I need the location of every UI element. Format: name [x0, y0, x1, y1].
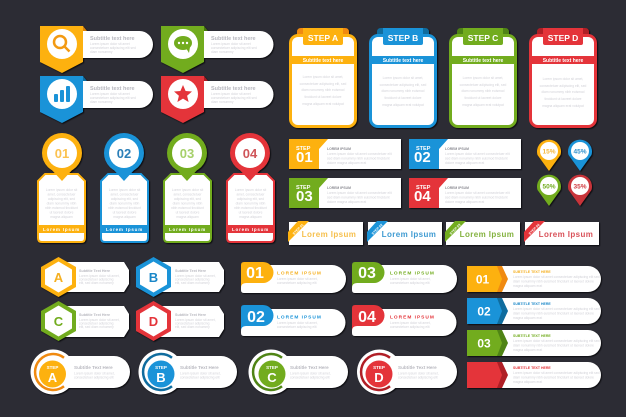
- panel: pin card 02: magna aliquam: [113, 215, 136, 219]
- panel: chart badge: Lorem ipsum dolor sit amet: [90, 92, 130, 96]
- icon: pin 45%: 45%: [573, 148, 587, 156]
- panel: pin card 04: diam nonummy nibh: [236, 202, 266, 206]
- panel: number pill 01: 01: [246, 265, 264, 282]
- panel: hexagon B: Subtitle Text Here: [175, 269, 206, 273]
- panel: step 02 box: LOREM IPSUM: [445, 147, 469, 151]
- panel: number pill 03: [352, 262, 457, 293]
- panel: arrow row 03: [467, 330, 601, 356]
- panel: step B card: Subtitle text here: [383, 58, 423, 64]
- panel: hexagon B: [136, 257, 224, 297]
- panel: hexagon B: B: [149, 270, 158, 285]
- panel: arrow row 04: SUBTITLE TEXT HERE: [513, 366, 551, 370]
- panel: number pill 01: consectetuer adipiscing elit: [277, 281, 317, 285]
- panel: circle step D: Lorem ipsum dolor sit amet,: [398, 372, 439, 376]
- panel: arrow row 01: SUBTITLE TEXT HERE: [513, 270, 551, 274]
- panel: circle step B: B: [156, 370, 166, 385]
- panel: hexagon D: elit, sed diam nonummy: [175, 325, 210, 329]
- panel: pin card 04: ut laoreet dolore: [239, 210, 263, 214]
- panel: step D card: consectetuer adipiscing elit, sed: [540, 84, 587, 88]
- panel: ribbon label green: Lorem Ipsum: [460, 230, 514, 239]
- panel: pin card 04: Lorem Ipsum: [232, 227, 269, 232]
- panel: ribbon label blue: [367, 221, 442, 245]
- panel: arrow row 03: 03: [477, 336, 491, 350]
- panel: circle step A: Subtitle Text Here: [74, 365, 113, 370]
- panel: arrow row 02: Lorem ipsum dolor sit amet consectetuer adipiscing elit sed: [513, 307, 600, 311]
- panel: step D card: diam nonummy nibh euismod: [541, 90, 585, 94]
- panel: chart badge: diam nonummy: [90, 100, 113, 104]
- panel: arrow row 04: diam nonummy nibh euismod tincidunt ut laoreet dolore: [513, 376, 594, 380]
- panel: step C card: tincidunt ut laoreet dolore: [464, 96, 502, 100]
- panel: circle step C: [248, 350, 348, 394]
- panel: arrow row 03: Lorem ipsum dolor sit amet consectetuer adipiscing elit sed: [513, 339, 600, 343]
- panel: step 03 box: STEP: [296, 185, 311, 191]
- panel: pin card 01: diam nonummy nibh: [47, 202, 77, 206]
- panel: pin card 03: magna aliquam: [176, 215, 199, 219]
- panel: arrow row 03: magna aliquam erat: [513, 348, 542, 352]
- panel: hexagon B: elit, sed diam nonummy: [175, 281, 210, 285]
- panel: step B card: consectetuer adipiscing elit, sed: [380, 83, 427, 87]
- panel: step A card: Lorem ipsum dolor sit amet,: [303, 75, 343, 79]
- panel: step A card: Subtitle text here: [303, 58, 343, 64]
- panel: search badge: [40, 26, 153, 73]
- panel: pin card 03: 03: [180, 146, 194, 161]
- panel: search badge: Lorem ipsum dolor sit amet: [90, 42, 130, 46]
- panel: number pill 03: Lorem ipsum dolor sit amet,: [390, 277, 431, 281]
- panel: number pill 04: LOREM IPSUM: [390, 314, 435, 320]
- panel: arrow row 02: [467, 298, 601, 324]
- panel: arrow row 03: diam nonummy nibh euismod tincidunt ut laoreet dolore: [513, 344, 594, 348]
- panel: pin card 04: [227, 133, 274, 242]
- panel: step C card: STEP C: [468, 33, 498, 43]
- panel: pin card 01: [38, 133, 85, 242]
- panel: pin card 04: nibh euismod tincidunt: [234, 206, 267, 210]
- panel: pin card 01: adipiscing elit, sed: [48, 197, 75, 201]
- panel: search badge: diam nonummy: [90, 50, 113, 54]
- panel: hexagon C: consectetuer adipiscing: [79, 322, 114, 326]
- panel: arrow row 02: diam nonummy nibh euismod tincidunt ut laoreet dolore: [513, 312, 594, 316]
- panel: pin card 02: Lorem ipsum dolor sit: [109, 188, 140, 192]
- panel: hexagon C: [41, 301, 129, 341]
- panel: hexagon D: Subtitle Text Here: [175, 313, 206, 317]
- panel: circle step C: C: [267, 370, 277, 385]
- panel: star badge: Subtitle text here: [211, 86, 256, 92]
- panel: chat badge: diam nonummy: [211, 50, 234, 54]
- panel: hexagon D: [136, 301, 224, 341]
- icon: pin 35%: [568, 175, 592, 206]
- panel: number pill 01: LOREM IPSUM: [277, 270, 322, 276]
- panel: circle step D: D: [374, 370, 384, 385]
- panel: step C card: [449, 28, 517, 128]
- panel: step 01 box: STEP: [296, 146, 311, 152]
- panel: arrow row 01: Lorem ipsum dolor sit amet consectetuer adipiscing elit sed: [513, 275, 600, 279]
- panel: pin card 02: diam nonummy nibh: [110, 202, 140, 206]
- panel: pin card 02: nibh euismod tincidunt: [108, 206, 141, 210]
- panel: ribbon label red: [524, 221, 599, 245]
- panel: circle step A: A: [48, 370, 58, 385]
- panel: circle step B: STEP: [155, 365, 167, 370]
- panel: arrow row 04: Lorem ipsum dolor sit amet consectetuer adipiscing elit sed: [513, 371, 600, 375]
- panel: circle step A: [30, 350, 130, 394]
- icon: pin 15%: 15%: [542, 148, 556, 156]
- panel: pin card 02: Lorem Ipsum: [106, 227, 143, 232]
- panel: step 04 box: [409, 178, 521, 208]
- panel: ribbon label yellow: [288, 221, 363, 245]
- icon: pin 50%: 50%: [542, 184, 556, 190]
- icon: pin 35%: 35%: [573, 184, 587, 190]
- panel: circle step B: [138, 350, 237, 394]
- panel: arrow row 02: magna aliquam erat: [513, 316, 542, 320]
- panel: pin card 01: ut laoreet dolore: [50, 210, 74, 214]
- panel: circle step D: Subtitle Text Here: [398, 365, 437, 370]
- panel: circle step B: Lorem ipsum dolor sit amet,: [180, 372, 221, 376]
- panel: hexagon A: Lorem ipsum dolor sit amet,: [79, 274, 120, 278]
- panel: arrow row 02: 02: [477, 304, 491, 318]
- panel: pin card 03: adipiscing elit, sed: [174, 197, 201, 201]
- panel: step 03 box: Lorem ipsum dolor sit amet consectetuer elit: [327, 191, 392, 195]
- panel: circle step A: Lorem ipsum dolor sit amet,: [74, 372, 115, 376]
- panel: pin card 03: Lorem ipsum dolor sit: [172, 188, 203, 192]
- panel: ribbon label green: STEP 03: [449, 223, 462, 236]
- panel: star badge: diam nonummy: [211, 100, 234, 104]
- panel: circle step C: Lorem ipsum dolor sit amet,: [290, 372, 331, 376]
- panel: step B card: diam nonummy nibh euismod: [381, 89, 425, 93]
- panel: hexagon A: [41, 257, 129, 297]
- panel: chat badge: [161, 26, 273, 73]
- panel: step 04 box: dolore magna aliquam erat: [445, 200, 484, 204]
- panel: step 02 box: dolore magna aliquam erat: [445, 161, 484, 165]
- panel: hexagon B: consectetuer adipiscing: [175, 278, 210, 282]
- panel: circle step C: STEP: [266, 365, 278, 370]
- panel: step A card: magna aliquam erat volutpat: [302, 102, 344, 106]
- panel: step 03 box: [289, 178, 401, 208]
- panel: step B card: magna aliquam erat volutpat: [382, 103, 424, 107]
- panel: pin card 01: Lorem ipsum dolor sit: [46, 188, 77, 192]
- panel: step 03 box: dolore magna aliquam erat: [327, 200, 366, 204]
- panel: hexagon C: Lorem ipsum dolor sit amet,: [79, 318, 120, 322]
- panel: number pill 04: Lorem ipsum dolor sit amet,: [390, 321, 431, 325]
- panel: pin card 01: 01: [55, 146, 69, 161]
- panel: step C card: consectetuer adipiscing elit, sed: [460, 83, 507, 87]
- panel: step 02 box: STEP: [416, 146, 431, 152]
- panel: number pill 03: 03: [358, 265, 376, 282]
- panel: step 02 box: [409, 139, 521, 169]
- panel: hexagon C: Subtitle Text Here: [79, 313, 110, 317]
- panel: circle step D: consectetuer adipiscing elit: [398, 376, 438, 380]
- panel: step A card: tincidunt ut laoreet dolore: [304, 95, 342, 99]
- panel: ribbon label green: [445, 221, 520, 245]
- panel: step D card: Lorem ipsum dolor sit amet,: [543, 77, 583, 81]
- panel: number pill 01: [241, 262, 346, 293]
- panel: number pill 04: 04: [358, 309, 376, 326]
- icon: pin 45%: [568, 140, 592, 171]
- panel: circle step D: STEP: [373, 365, 385, 370]
- panel: pin card 03: diam nonummy nibh: [173, 202, 203, 206]
- panel: step 02 box: Lorem ipsum dolor sit amet consectetuer elit: [445, 152, 510, 156]
- panel: arrow row 04: [467, 362, 601, 388]
- panel: ribbon label red: STEP 04: [528, 223, 541, 236]
- panel: step D card: tincidunt ut laoreet dolore: [544, 97, 582, 101]
- panel: step B card: [369, 28, 437, 128]
- panel: pin card 03: nibh euismod tincidunt: [171, 206, 204, 210]
- panel: arrow row 02: SUBTITLE TEXT HERE: [513, 302, 551, 306]
- panel: step A card: diam nonummy nibh euismod: [301, 88, 345, 92]
- panel: step 01 box: 01: [296, 149, 313, 166]
- panel: step 04 box: 04: [414, 188, 431, 205]
- panel: step 02 box: 02: [414, 149, 431, 166]
- panel: pin card 03: amet, consectetuer: [173, 192, 202, 196]
- panel: circle step B: Subtitle Text Here: [180, 365, 219, 370]
- panel: step D card: Subtitle text here: [543, 58, 583, 64]
- panel: pin card 01: amet, consectetuer: [47, 192, 76, 196]
- panel: step 04 box: Lorem ipsum dolor sit amet consectetuer elit: [445, 191, 510, 195]
- panel: pin card 01: nibh euismod tincidunt: [45, 206, 78, 210]
- panel: pin card 04: adipiscing elit, sed: [237, 197, 264, 201]
- panel: step 01 box: [289, 139, 401, 169]
- icon: pin 50%: [537, 175, 561, 206]
- panel: pin card 04: amet, consectetuer: [236, 192, 265, 196]
- panel: circle step C: Subtitle Text Here: [290, 365, 329, 370]
- panel: step 01 box: sed diam nonummy nibh euismod tincidunt: [327, 156, 390, 160]
- panel: hexagon D: consectetuer adipiscing: [175, 322, 210, 326]
- panel: number pill 01: Lorem ipsum dolor sit amet,: [277, 277, 318, 281]
- panel: arrow row 01: [467, 266, 601, 292]
- panel: number pill 04: consectetuer adipiscing elit: [390, 325, 430, 329]
- panel: search badge: Subtitle text here: [90, 36, 135, 42]
- panel: step A card: consectetuer adipiscing elit, sed: [300, 82, 347, 86]
- panel: pin card 03: Lorem Ipsum: [169, 227, 206, 232]
- panel: circle step B: consectetuer adipiscing elit: [180, 376, 220, 380]
- panel: number pill 02: Lorem ipsum dolor sit amet,: [277, 321, 318, 325]
- panel: star badge: Lorem ipsum dolor sit amet: [211, 92, 251, 96]
- panel: ribbon label yellow: Lorem Ipsum: [302, 230, 356, 239]
- panel: pin card 04: magna aliquam: [239, 215, 262, 219]
- panel: arrow row 01: 01: [476, 272, 489, 286]
- panel: step 03 box: 03: [296, 188, 313, 205]
- panel: number pill 04: [352, 305, 456, 336]
- panel: arrow row 03: SUBTITLE TEXT HERE: [513, 334, 551, 338]
- panel: number pill 02: LOREM IPSUM: [277, 314, 322, 320]
- panel: chat badge: Lorem ipsum dolor sit amet: [211, 42, 251, 46]
- panel: hexagon A: A: [54, 270, 64, 285]
- panel: pin card 04: 04: [243, 146, 258, 161]
- panel: hexagon C: elit, sed diam nonummy: [79, 325, 114, 329]
- panel: chart badge: Subtitle text here: [90, 86, 135, 92]
- panel: number pill 03: LOREM IPSUM: [390, 270, 435, 276]
- panel: number pill 03: consectetuer adipiscing elit: [390, 281, 430, 285]
- panel: ribbon label blue: STEP 02: [371, 223, 384, 236]
- panel: number pill 02: [241, 305, 346, 336]
- panel: star badge: [161, 76, 274, 123]
- panel: circle step A: STEP: [47, 365, 58, 370]
- icon: pin 15%: [537, 140, 561, 171]
- panel: step A card: STEP A: [308, 33, 338, 43]
- panel: pin card 01: Lorem Ipsum: [43, 227, 80, 232]
- panel: ribbon label blue: Lorem Ipsum: [382, 230, 436, 239]
- panel: step 01 box: Lorem ipsum dolor sit amet consectetuer elit: [327, 152, 392, 156]
- panel: arrow row 01: magna aliquam erat: [513, 284, 542, 288]
- panel: circle step C: consectetuer adipiscing elit: [290, 376, 330, 380]
- panel: step B card: Lorem ipsum dolor sit amet,: [383, 76, 423, 80]
- panel: star badge: consectetuer adipiscing elit sed: [211, 96, 257, 100]
- panel: step C card: Lorem ipsum dolor sit amet,: [463, 76, 503, 80]
- panel: pin card 02: [101, 133, 148, 242]
- panel: pin card 03: ut laoreet dolore: [176, 210, 200, 214]
- panel: chart badge: consectetuer adipiscing elit sed: [90, 96, 136, 100]
- panel: hexagon D: D: [149, 314, 158, 329]
- panel: hexagon A: Subtitle Text Here: [79, 269, 110, 273]
- panel: step C card: diam nonummy nibh euismod: [461, 89, 505, 93]
- panel: ribbon label red: Lorem Ipsum: [539, 230, 593, 239]
- panel: step C card: magna aliquam erat volutpat: [462, 103, 504, 107]
- panel: hexagon A: elit, sed diam nonummy: [79, 281, 114, 285]
- panel: pin card 02: ut laoreet dolore: [113, 210, 137, 214]
- panel: search badge: consectetuer adipiscing elit sed: [90, 46, 136, 50]
- panel: step B card: tincidunt ut laoreet dolore: [384, 96, 422, 100]
- panel: step D card: [529, 28, 597, 128]
- panel: step 02 box: sed diam nonummy nibh euismod tincidunt: [445, 156, 508, 160]
- panel: pin card 03: [164, 133, 211, 242]
- panel: step B card: STEP B: [388, 33, 418, 43]
- panel: hexagon B: Lorem ipsum dolor sit amet,: [175, 274, 216, 278]
- panel: hexagon C: C: [54, 314, 64, 329]
- panel: number pill 02: 02: [247, 309, 265, 326]
- panel: ribbon label yellow: STEP 01: [292, 223, 305, 236]
- panel: step 01 box: LOREM IPSUM: [327, 147, 351, 151]
- panel: chat badge: Subtitle text here: [211, 36, 256, 42]
- panel: chat badge: consectetuer adipiscing elit sed: [211, 46, 257, 50]
- panel: arrow row 04: magna aliquam erat: [513, 380, 542, 384]
- panel: circle step D: [357, 350, 457, 394]
- panel: chart badge: [40, 76, 153, 123]
- panel: step D card: STEP D: [548, 33, 578, 43]
- panel: hexagon A: consectetuer adipiscing: [79, 278, 114, 282]
- panel: step D card: magna aliquam erat volutpat: [542, 104, 584, 108]
- panel: step A card: [289, 28, 357, 128]
- panel: pin card 02: 02: [117, 146, 131, 161]
- panel: pin card 02: adipiscing elit, sed: [111, 197, 138, 201]
- panel: arrow row 01: diam nonummy nibh euismod tincidunt ut laoreet dolore: [513, 280, 594, 284]
- panel: hexagon D: Lorem ipsum dolor sit amet,: [175, 318, 216, 322]
- panel: circle step A: consectetuer adipiscing elit: [74, 376, 114, 380]
- panel: pin card 02: amet, consectetuer: [110, 192, 139, 196]
- panel: step 04 box: sed diam nonummy nibh euismod tincidunt: [445, 196, 508, 200]
- panel: step 03 box: LOREM IPSUM: [327, 186, 351, 190]
- panel: pin card 04: Lorem ipsum dolor sit: [235, 188, 266, 192]
- panel: step 04 box: LOREM IPSUM: [445, 186, 469, 190]
- panel: step 01 box: dolore magna aliquam erat: [327, 161, 366, 165]
- panel: pin card 01: magna aliquam: [50, 215, 73, 219]
- panel: step 03 box: sed diam nonummy nibh euismod tincidunt: [327, 196, 390, 200]
- panel: step 04 box: STEP: [416, 185, 431, 191]
- panel: number pill 02: consectetuer adipiscing elit: [277, 325, 317, 329]
- panel: step C card: Subtitle text here: [463, 58, 503, 64]
